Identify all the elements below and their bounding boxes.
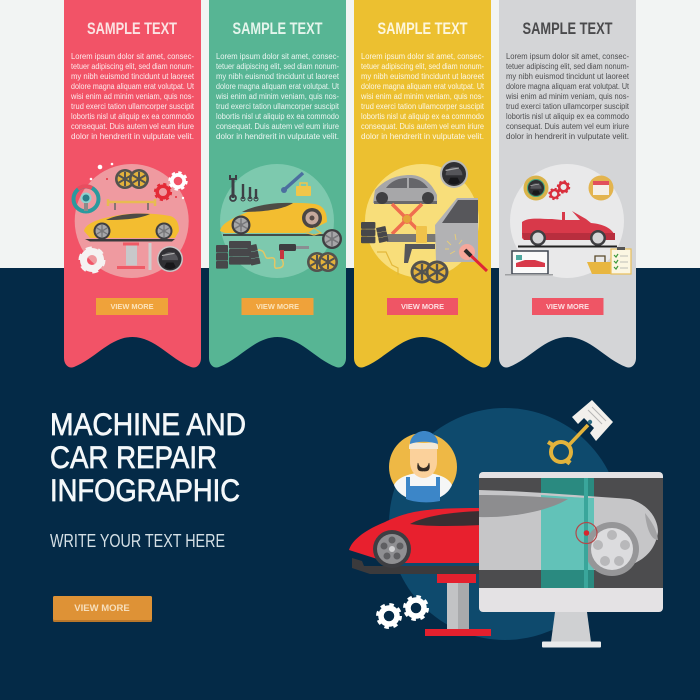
body text: dolore magna aliquam erat volutpat. Ut — [216, 82, 340, 91]
body text: trud exerci tation ullamcorper suscipit — [361, 102, 485, 111]
body text: dolor in hendrerit in vulputate velit. — [361, 132, 484, 141]
body text: Lorem ipsum dolor sit amet, consec- — [361, 52, 484, 61]
title: CAR REPAIR — [50, 439, 217, 475]
red car — [349, 508, 482, 574]
body text: Lorem ipsum dolor sit amet, consec- — [216, 52, 339, 61]
heading: SAMPLE TEXT — [232, 20, 322, 38]
body text: trud exerci tation ullamcorper suscipit — [216, 102, 340, 111]
body text: consequat. Duis autem vel eum iriure — [71, 122, 195, 131]
main button — [53, 596, 152, 622]
button: VIEW MORE — [401, 302, 444, 311]
body text: wisi enim ad minim veniam, quis nos- — [70, 92, 194, 101]
body text: dolore magna aliquam erat volutpat. Ut — [361, 82, 485, 91]
body text: my nibh euismod tincidunt ut laoreet — [361, 72, 485, 81]
body text: wisi enim ad minim veniam, quis nos- — [360, 92, 484, 101]
panel: red ribbon — [64, 0, 201, 368]
body text — [360, 52, 485, 141]
x-rayed car — [479, 478, 658, 588]
illustration: car repair scene — [349, 400, 663, 648]
car lift — [425, 574, 491, 636]
icon: mechanic — [389, 431, 457, 502]
heading: SAMPLE TEXT — [87, 20, 177, 38]
body text: my nibh euismod tincidunt ut laoreet — [216, 72, 340, 81]
body text: tetuer adipiscing elit, sed diam nonum- — [361, 62, 484, 71]
ribbon shape — [499, 0, 636, 368]
body text: my nibh euismod tincidunt ut laoreet — [71, 72, 195, 81]
button — [242, 298, 314, 315]
body text: lobortis nisl ut aliquip ex ea commodo — [71, 112, 195, 121]
body text: dolore magna aliquam erat volutpat. Ut — [71, 82, 195, 91]
body text: dolor in hendrerit in vulputate velit. — [71, 132, 194, 141]
panel: gray ribbon — [499, 0, 636, 368]
monitor body — [479, 472, 663, 612]
x-ray screen — [479, 478, 663, 588]
illustration: lifted yellow sports car — [74, 163, 189, 278]
background: light top band — [0, 0, 700, 268]
body text: my nibh euismod tincidunt ut laoreet — [506, 72, 630, 81]
main button: VIEW MORE — [74, 603, 130, 614]
button — [387, 298, 458, 315]
body text: tetuer adipiscing elit, sed diam nonum- — [506, 62, 629, 71]
body text: consequat. Duis autem vel eum iriure — [361, 122, 485, 131]
body text: Lorem ipsum dolor sit amet, consec- — [71, 52, 194, 61]
body text — [215, 52, 340, 141]
body text: wisi enim ad minim veniam, quis nos- — [215, 92, 339, 101]
button: VIEW MORE — [546, 302, 589, 311]
icon: gears — [378, 596, 428, 628]
heading: SAMPLE TEXT — [522, 20, 612, 38]
heading: SAMPLE TEXT — [378, 20, 468, 38]
monitor stand — [551, 612, 591, 642]
ribbon shape — [209, 0, 346, 368]
panel: yellow ribbon — [354, 0, 491, 368]
body text: trud exerci tation ullamcorper suscipit — [506, 102, 630, 111]
illustration: car lift and door painting — [361, 160, 487, 284]
ribbon shape — [64, 0, 201, 368]
body text: lobortis nisl ut aliquip ex ea commodo — [506, 112, 630, 121]
button — [532, 298, 604, 315]
panel: green ribbon — [209, 0, 346, 368]
title: MACHINE AND — [50, 406, 246, 442]
body text — [505, 52, 630, 141]
button: VIEW MORE — [110, 302, 154, 311]
body text: consequat. Duis autem vel eum iriure — [506, 122, 630, 131]
subtitle: WRITE YOUR TEXT HERE — [50, 530, 225, 551]
illustration: red convertible — [505, 164, 631, 278]
button: VIEW MORE — [256, 302, 299, 311]
body text: dolor in hendrerit in vulputate velit. — [506, 132, 629, 141]
body text: dolore magna aliquam erat volutpat. Ut — [506, 82, 630, 91]
body text: Lorem ipsum dolor sit amet, consec- — [506, 52, 629, 61]
body text — [70, 52, 195, 141]
body text: dolor in hendrerit in vulputate velit. — [216, 132, 339, 141]
scan band — [541, 478, 594, 588]
body text: tetuer adipiscing elit, sed diam nonum- — [71, 62, 194, 71]
icon: piston — [548, 400, 613, 464]
backdrop circle — [389, 408, 621, 640]
ribbon shape — [354, 0, 491, 368]
body text: tetuer adipiscing elit, sed diam nonum- — [216, 62, 339, 71]
monitor — [479, 472, 663, 648]
body text: lobortis nisl ut aliquip ex ea commodo — [361, 112, 485, 121]
body text: wisi enim ad minim veniam, quis nos- — [505, 92, 629, 101]
illustration: wheel change and tools — [216, 164, 342, 278]
background: navy lower section — [0, 268, 700, 700]
title: INFOGRAPHIC — [50, 472, 240, 508]
body text: trud exerci tation ullamcorper suscipit — [71, 102, 195, 111]
body text: consequat. Duis autem vel eum iriure — [216, 122, 340, 131]
button — [96, 298, 168, 315]
title — [50, 406, 246, 508]
body text: lobortis nisl ut aliquip ex ea commodo — [216, 112, 340, 121]
